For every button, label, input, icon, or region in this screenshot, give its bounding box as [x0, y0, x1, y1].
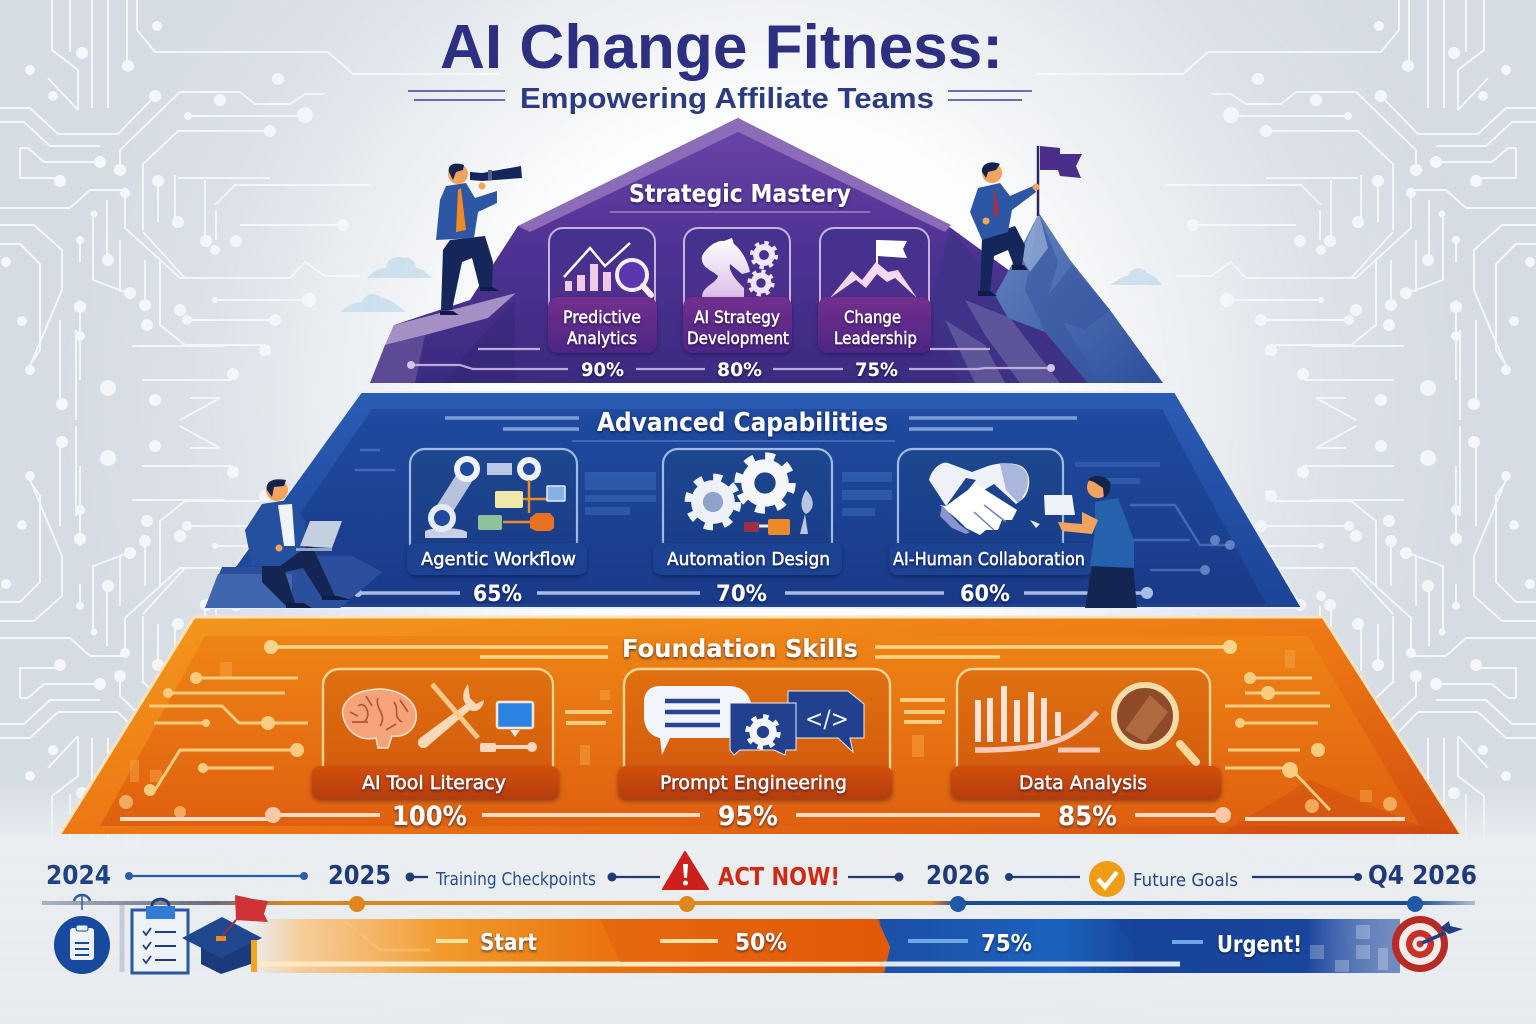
icon: brain, tools and screen	[343, 684, 537, 752]
subtitle	[408, 83, 1032, 115]
timeline labels: Q4 2026	[1368, 861, 1477, 891]
label	[818, 297, 931, 353]
label	[312, 766, 559, 799]
label: Analytics	[567, 329, 637, 349]
progress row: Strategic Mastery: 80%	[717, 359, 762, 381]
label: AI Tool Literacy	[362, 772, 506, 794]
label: AI-Human Collaboration	[893, 549, 1085, 570]
progress row	[354, 582, 1153, 607]
timeline labels	[46, 861, 1477, 891]
icon: warning triangle	[663, 852, 708, 889]
tier: Strategic Mastery	[370, 118, 1163, 383]
label: Automation Design	[667, 549, 830, 570]
icon: clipboard checklist	[122, 899, 188, 973]
label	[683, 297, 792, 353]
progress row: Strategic Mastery	[407, 349, 1055, 381]
label	[653, 543, 842, 575]
left circuit traces	[119, 672, 1397, 818]
timeline	[42, 852, 1477, 974]
card: Predictive Analytics	[548, 228, 657, 353]
progress row: 65%	[473, 582, 522, 607]
card: Prompt Engineering	[618, 669, 892, 799]
icon: chat, gear and code bubbles: </>	[805, 705, 849, 733]
icon: robotic workflow	[425, 459, 565, 538]
progress band: 50%	[735, 930, 787, 956]
progress band: 75%	[981, 931, 1032, 957]
label: AI Strategy	[694, 308, 780, 328]
icon: chat, gear and code bubbles	[644, 686, 864, 755]
label: Leadership	[834, 329, 917, 349]
figure: seated man with laptop	[205, 479, 382, 608]
progress row: 95%	[718, 801, 778, 832]
tier: Foundation Skills	[60, 617, 1461, 834]
heading: Strategic Mastery	[629, 179, 851, 208]
heading	[445, 408, 1077, 441]
icon: check badge	[1089, 861, 1125, 897]
progress band: Urgent!	[1217, 932, 1302, 958]
timeline labels: 2026	[926, 861, 990, 891]
progress band	[250, 919, 1400, 973]
label	[951, 766, 1221, 799]
icon: mountain flag	[830, 240, 917, 298]
progress row: Strategic Mastery: 90%	[581, 359, 624, 381]
icon: chart and magnifier	[564, 243, 651, 295]
card: Automation Design	[653, 449, 842, 575]
card: AI Strategy Development	[683, 228, 792, 353]
icon: handshake	[929, 463, 1029, 535]
label: Agentic Workflow	[421, 549, 576, 570]
figure: man with telescope	[436, 164, 522, 315]
progress row	[120, 801, 1405, 832]
card: Change Leadership	[818, 228, 931, 353]
label: Development	[687, 329, 789, 349]
blue trapezoid	[205, 392, 1302, 608]
tier: Advanced Capabilities	[205, 392, 1302, 608]
card: AI-Human Collaboration	[889, 449, 1093, 575]
label	[618, 766, 892, 799]
icon: target and arrow	[1392, 916, 1463, 972]
progress row: 60%	[960, 582, 1010, 607]
orange trapezoid	[60, 617, 1461, 834]
timeline labels: ACT NOW!	[718, 862, 840, 891]
icon: rocky peak	[995, 213, 1163, 383]
icon: bar chart and magnifier	[975, 685, 1196, 762]
progress row: 85%	[1058, 801, 1117, 832]
timeline labels: 2025	[328, 861, 391, 891]
icon: gears	[689, 457, 813, 535]
card: AI Tool Literacy	[312, 669, 559, 799]
purple peak	[370, 118, 1163, 383]
connector lines	[125, 872, 1362, 882]
icon: graduation cap and flag	[182, 895, 268, 974]
icon: chess knight and gears	[702, 238, 776, 297]
label	[407, 543, 587, 575]
label: Predictive	[563, 308, 641, 328]
heading: Foundation Skills	[622, 634, 858, 663]
clouds	[340, 257, 1162, 312]
progress row: 100%	[392, 801, 467, 832]
label: Data Analysis	[1019, 772, 1147, 794]
card: Data Analysis	[951, 669, 1221, 799]
progress band: Start	[480, 930, 537, 956]
figure: man with tablet	[1030, 476, 1137, 608]
progress row: Strategic Mastery: 75%	[855, 359, 898, 381]
label	[548, 297, 657, 353]
heading: Advanced Capabilities	[597, 408, 888, 438]
label: Change	[844, 308, 901, 328]
heading	[264, 634, 1237, 663]
progress row: 70%	[716, 582, 767, 607]
label: Prompt Engineering	[660, 772, 847, 794]
timeline labels: Training Checkpoints	[435, 869, 596, 890]
card: Agentic Workflow	[407, 449, 587, 575]
label	[889, 543, 1093, 575]
timeline axis	[42, 896, 1475, 912]
icon: checkpoint badge	[54, 895, 110, 974]
subtitle: Empowering Affiliate Teams	[520, 83, 934, 115]
timeline labels: 2024	[46, 861, 111, 891]
title: AI Change Fitness:	[440, 13, 1003, 82]
figure: man with flag	[970, 146, 1082, 296]
timeline labels: Future Goals	[1133, 870, 1238, 891]
